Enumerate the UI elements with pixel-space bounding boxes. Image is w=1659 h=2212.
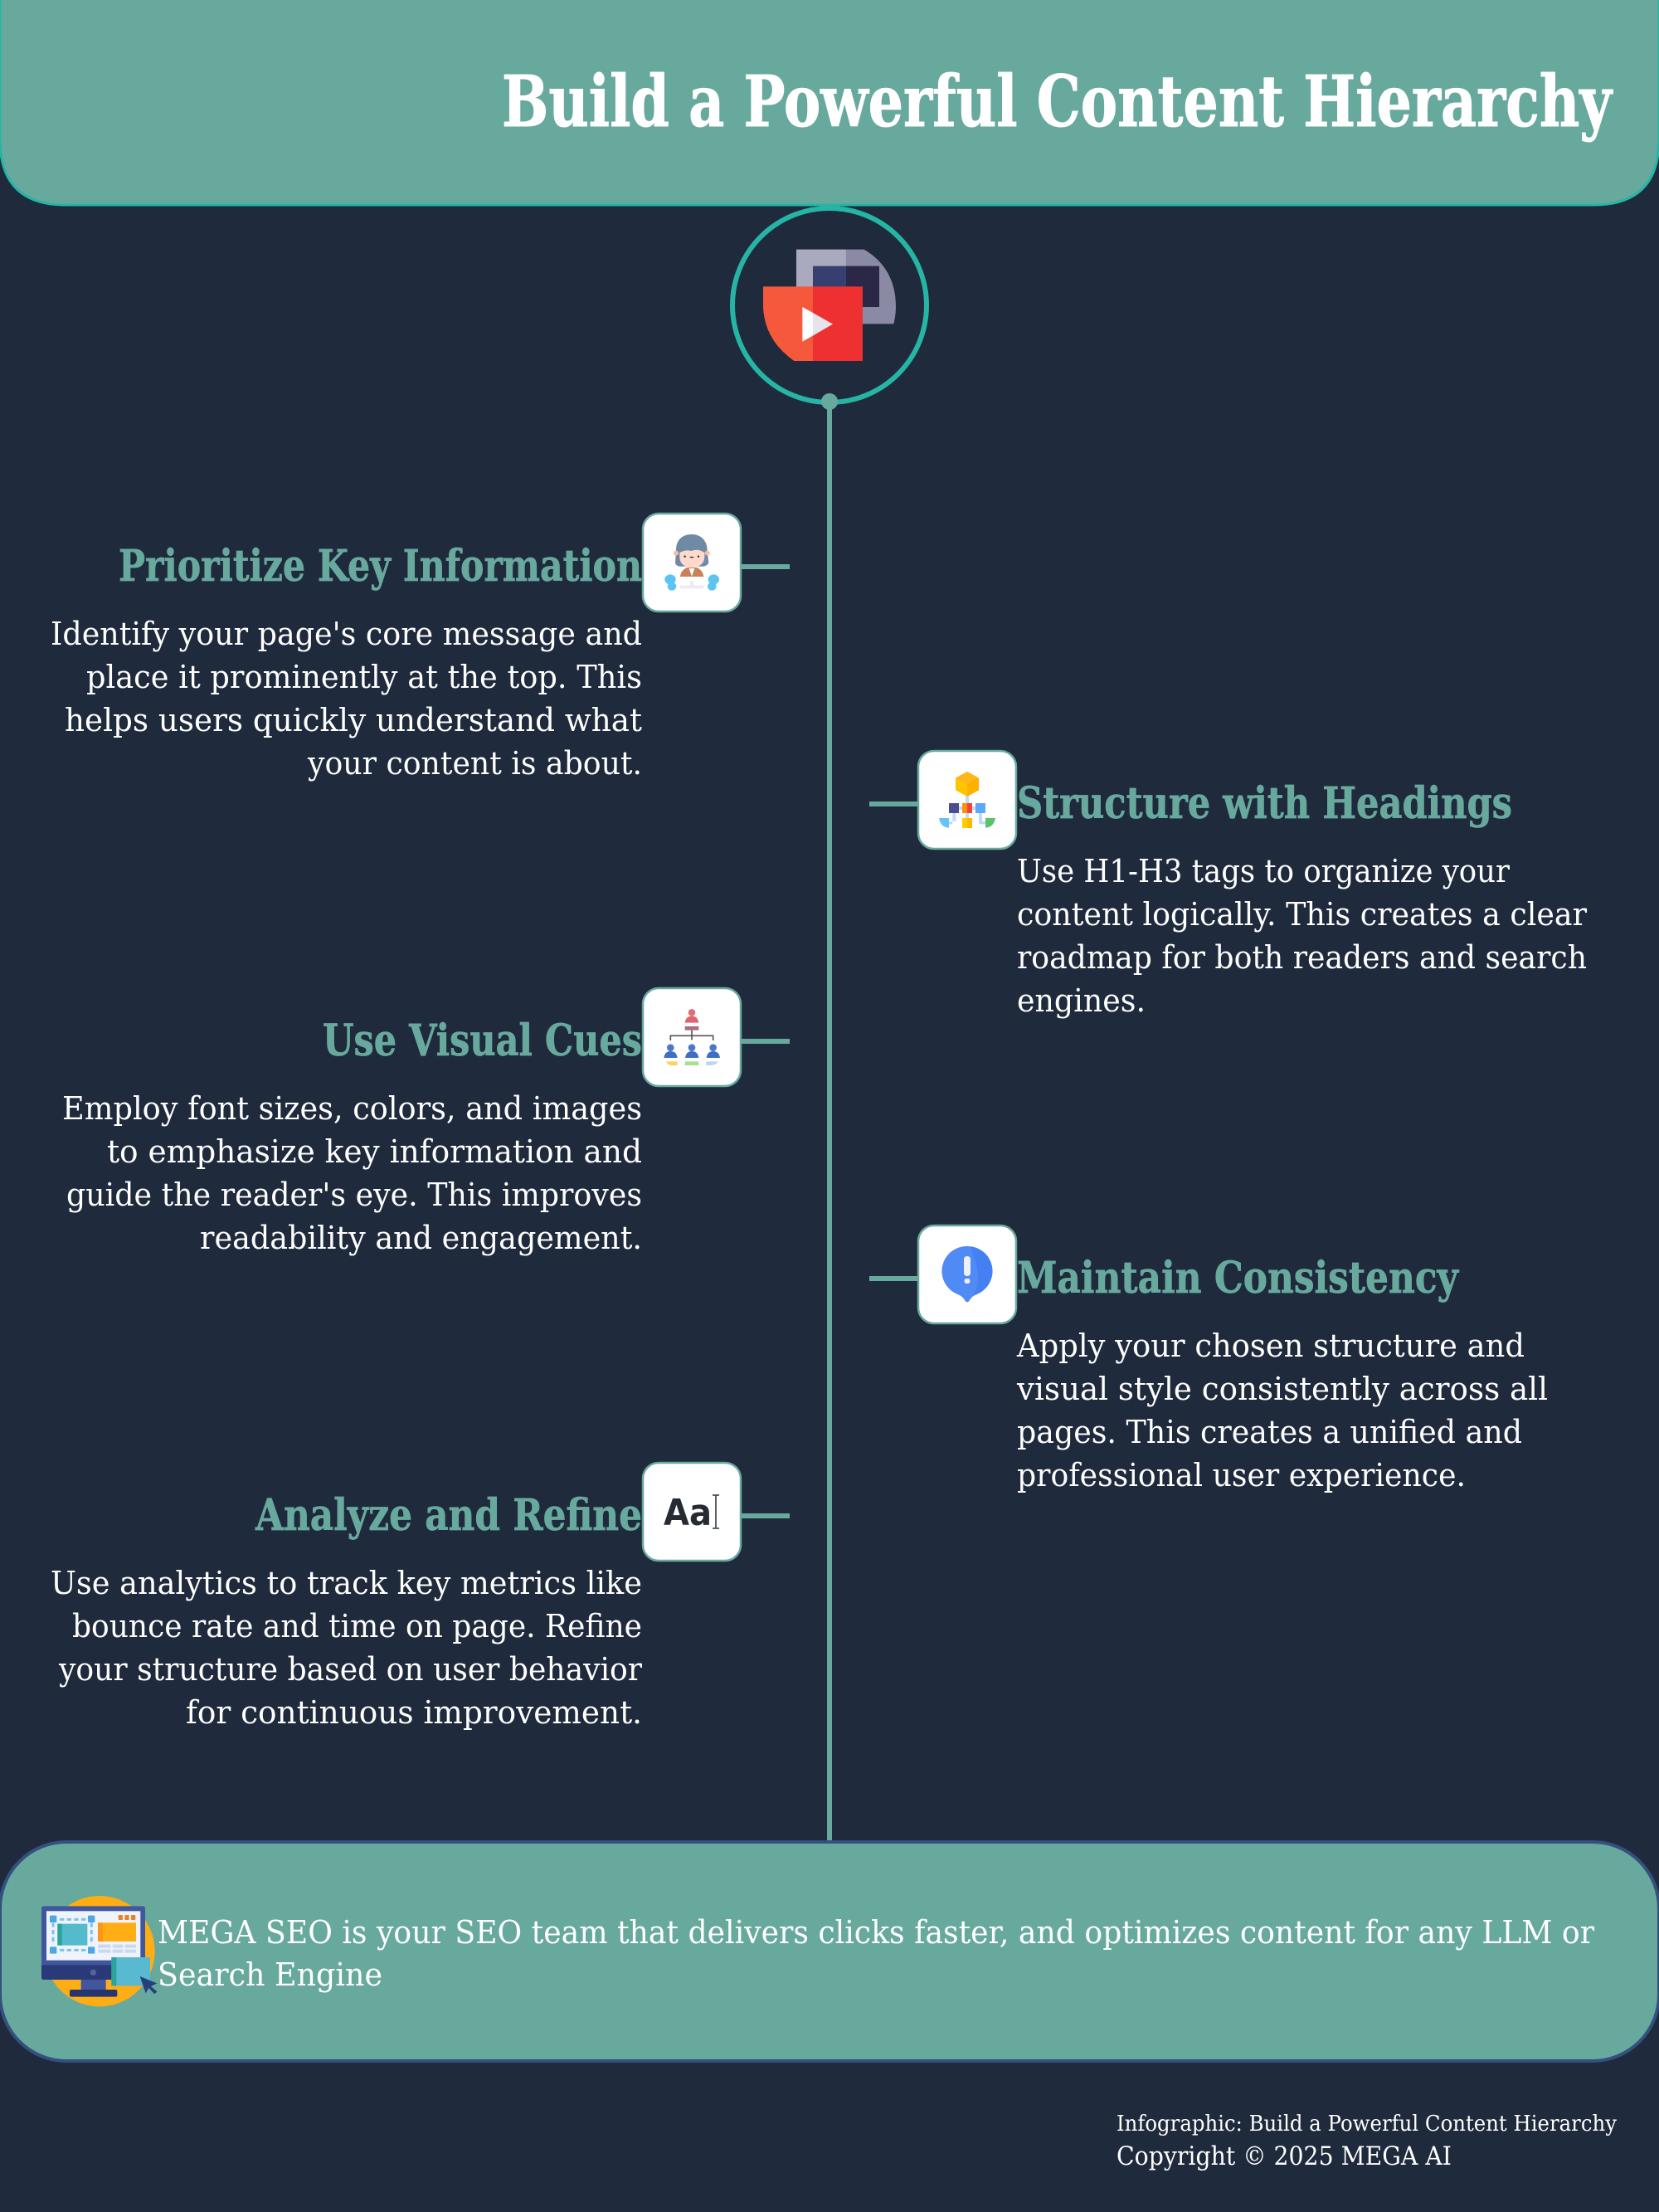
icon card: typography Aa: Aa [664,1492,712,1534]
timeline top dot [821,393,838,410]
footer credit text: Copyright © 2025 MEGA AI [1117,2141,1452,2171]
body text: Use H1-H3 tags to organize your [1017,853,1511,889]
icon card: alert bubble [918,1225,1016,1323]
icon card: structure diagram [918,751,1016,849]
body text [1016,1328,1548,1493]
icon card: org chart [643,988,741,1086]
header banner [0,0,1659,205]
body text: Use analytics to track key metrics like [51,1565,642,1601]
icon: video layers [763,250,896,361]
step 4: maintain consistency [869,1225,1548,1493]
body text: to emphasize key information and [107,1133,642,1170]
body text [51,616,642,782]
body text [51,1565,643,1731]
body text: place it prominently at the top. This [86,659,642,695]
icon card: typography Aa [643,1463,741,1561]
body text: your structure based on user behavior [58,1651,643,1688]
body text: Identify your page's core message and [51,616,642,652]
icon: monitor with cursor [41,1896,158,2006]
body text: engines. [1017,982,1146,1019]
body text: visual style consistently across all [1016,1371,1548,1407]
callout text [158,1914,1595,1993]
body text: professional user experience. [1017,1457,1466,1493]
callout text: Search Engine [158,1956,382,1993]
step 2: structure with headings [869,751,1588,1019]
heading: Use Visual Cues [323,1016,642,1066]
body text [62,1090,642,1256]
body text: your content is about. [307,745,642,782]
body text [1017,853,1588,1019]
body text: for continuous improvement. [186,1694,642,1731]
body text: Employ font sizes, colors, and images [62,1090,642,1127]
body text: content logically. This creates a clear [1017,896,1588,933]
connector [741,564,790,569]
connector [741,1513,790,1518]
body text: readability and engagement. [200,1220,642,1256]
heading: Analyze and Refine [255,1490,642,1541]
step 1: prioritize key information [51,514,790,782]
connector [741,1039,790,1044]
step 5: analyze and refine [51,1463,790,1731]
top circle with video icon [732,208,927,410]
connector [869,1276,918,1281]
footer credit text: Infographic: Build a Powerful Content Hierarchy [1117,2112,1617,2136]
body text: bounce rate and time on page. Refine [72,1608,642,1644]
body text: Apply your chosen structure and [1016,1328,1525,1364]
footer banner [0,1842,1659,2061]
step 3: use visual cues [62,988,790,1256]
icon card: person [643,514,741,611]
body text: guide the reader's eye. This improves [66,1177,642,1213]
central timeline line [827,402,832,1842]
body text: roadmap for both readers and search [1017,939,1587,976]
body text: pages. This creates a unified and [1017,1414,1522,1450]
heading: Prioritize Key Information [119,541,642,592]
heading: Structure with Headings [1017,778,1512,829]
callout text: MEGA SEO is your SEO team that delivers clicks faster, and optimizes content for any LLM or [158,1914,1595,1951]
footer credit text [1117,2112,1617,2171]
body text: helps users quickly understand what [65,702,642,738]
connector [869,801,918,806]
heading: Maintain Consistency [1017,1253,1459,1303]
